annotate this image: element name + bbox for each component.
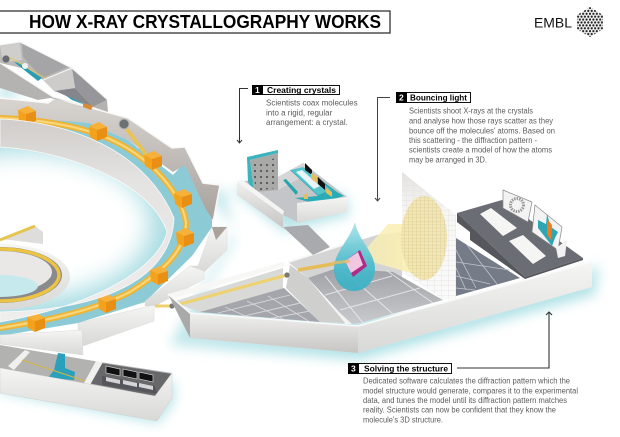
left room back wall [172, 268, 283, 312]
step 2 text: scientists create a model of how the atoms [409, 146, 552, 154]
right floor tiles [456, 238, 520, 296]
step 2 text: this scattering - the diffraction pattern - [409, 136, 537, 145]
title banner: HOW X-RAY CRYSTALLOGRAPHY WORKS [29, 12, 381, 32]
step 2 text: may be arranged in 3D. [409, 156, 487, 164]
keyboards [106, 377, 153, 390]
magnet cube 8 [27, 313, 45, 332]
front hutch wall [168, 262, 592, 353]
step 2 text: Scientists shoot X-rays at the crystals [409, 106, 533, 116]
step 1 text: into a rigid, regular [266, 108, 333, 118]
step 3 heading: Solving the structure [364, 364, 449, 374]
teal bench [290, 163, 344, 204]
step 2 heading [396, 92, 470, 103]
step 3 text: molecule's 3D structure. [363, 416, 443, 424]
magnet cube 6 [150, 266, 168, 285]
teal floor glow [0, 85, 600, 423]
room walls [0, 63, 108, 112]
divider wall [285, 263, 352, 324]
step 1 heading: Creating crystals [267, 86, 337, 95]
step 1 heading [252, 85, 340, 95]
inner ring wall [0, 119, 174, 322]
computer monitors [106, 366, 153, 382]
step 2 callout [396, 92, 555, 164]
step 2 heading: Bouncing light [410, 94, 467, 102]
crystal lab [237, 150, 347, 255]
outer ring wall [0, 98, 220, 220]
x-ray diffraction cone [358, 196, 447, 280]
corridor [283, 225, 330, 255]
step 3 text: model structure would generate, compares it to the experimental [363, 386, 578, 396]
control desk platform [457, 190, 583, 279]
step 1 arrow [237, 88, 248, 143]
perforated tower [247, 150, 278, 192]
step 2 text: and analyse how those rays scatter as they [409, 116, 553, 126]
teal instrument [48, 353, 75, 380]
magnet cube 7 [98, 294, 116, 313]
step 3 heading: 3 [351, 364, 356, 374]
step 2 arrow [375, 98, 390, 201]
magnet cube 1 [18, 106, 36, 125]
step 3 text: data, and tunes the model until its diffraction pattern matches [363, 396, 567, 405]
left room wall top [168, 262, 285, 298]
experiment hutch [155, 172, 592, 353]
sample stage [14, 62, 42, 81]
magnet cube 5 [176, 228, 194, 247]
monitor structure [532, 205, 562, 250]
lower beamline rooms [0, 345, 172, 421]
step 1 callout [252, 85, 358, 127]
centre floor tiles [308, 268, 443, 324]
centre room back wall [288, 232, 402, 323]
step 1 text: Scientists coax molecules [266, 98, 358, 108]
synchrotron ring [0, 98, 227, 355]
step 3 text: Dedicated software calculates the diffraction pattern which the [363, 376, 571, 386]
left floor tiles [200, 288, 320, 322]
keyboard 1 [480, 208, 517, 236]
step 1 text: arrangement: a crystal. [266, 118, 348, 127]
small inner ring [0, 226, 70, 310]
water drop with crystal [333, 222, 375, 291]
inner beam [155, 275, 287, 306]
room 1 [0, 42, 72, 80]
ring interior [0, 147, 166, 312]
magnet cube 3 [144, 151, 162, 170]
lab walls [237, 182, 283, 228]
electron beam [0, 118, 186, 328]
top left experiment rooms [0, 42, 108, 112]
EMBL logo: EMBL [534, 14, 572, 30]
step 2 heading: 2 [399, 92, 404, 102]
front wall [0, 368, 172, 421]
diffraction panel [402, 172, 456, 300]
teal ring floor [0, 113, 212, 336]
lower ring wall segments [0, 227, 227, 355]
keyboard 2 [509, 235, 546, 264]
EMBL logo [534, 7, 603, 37]
magnet cube 2 [89, 122, 107, 141]
magnet cube 4 [174, 189, 192, 208]
step 3 text [363, 376, 578, 424]
step 1 heading: 1 [255, 85, 260, 95]
console base [102, 376, 157, 394]
step 3 arrow [457, 312, 552, 368]
monitor pattern [503, 190, 532, 222]
step 3 text: reality. Scientists can now be confident that they know the [363, 406, 557, 414]
beamline port [119, 119, 129, 129]
step 3 callout [348, 363, 578, 424]
step 2 text [409, 106, 555, 164]
step 3 heading [348, 363, 452, 374]
step 2 text: bounce off the molecules' atoms. Based on [409, 126, 555, 136]
chair [283, 179, 298, 195]
room 2 [43, 68, 75, 92]
